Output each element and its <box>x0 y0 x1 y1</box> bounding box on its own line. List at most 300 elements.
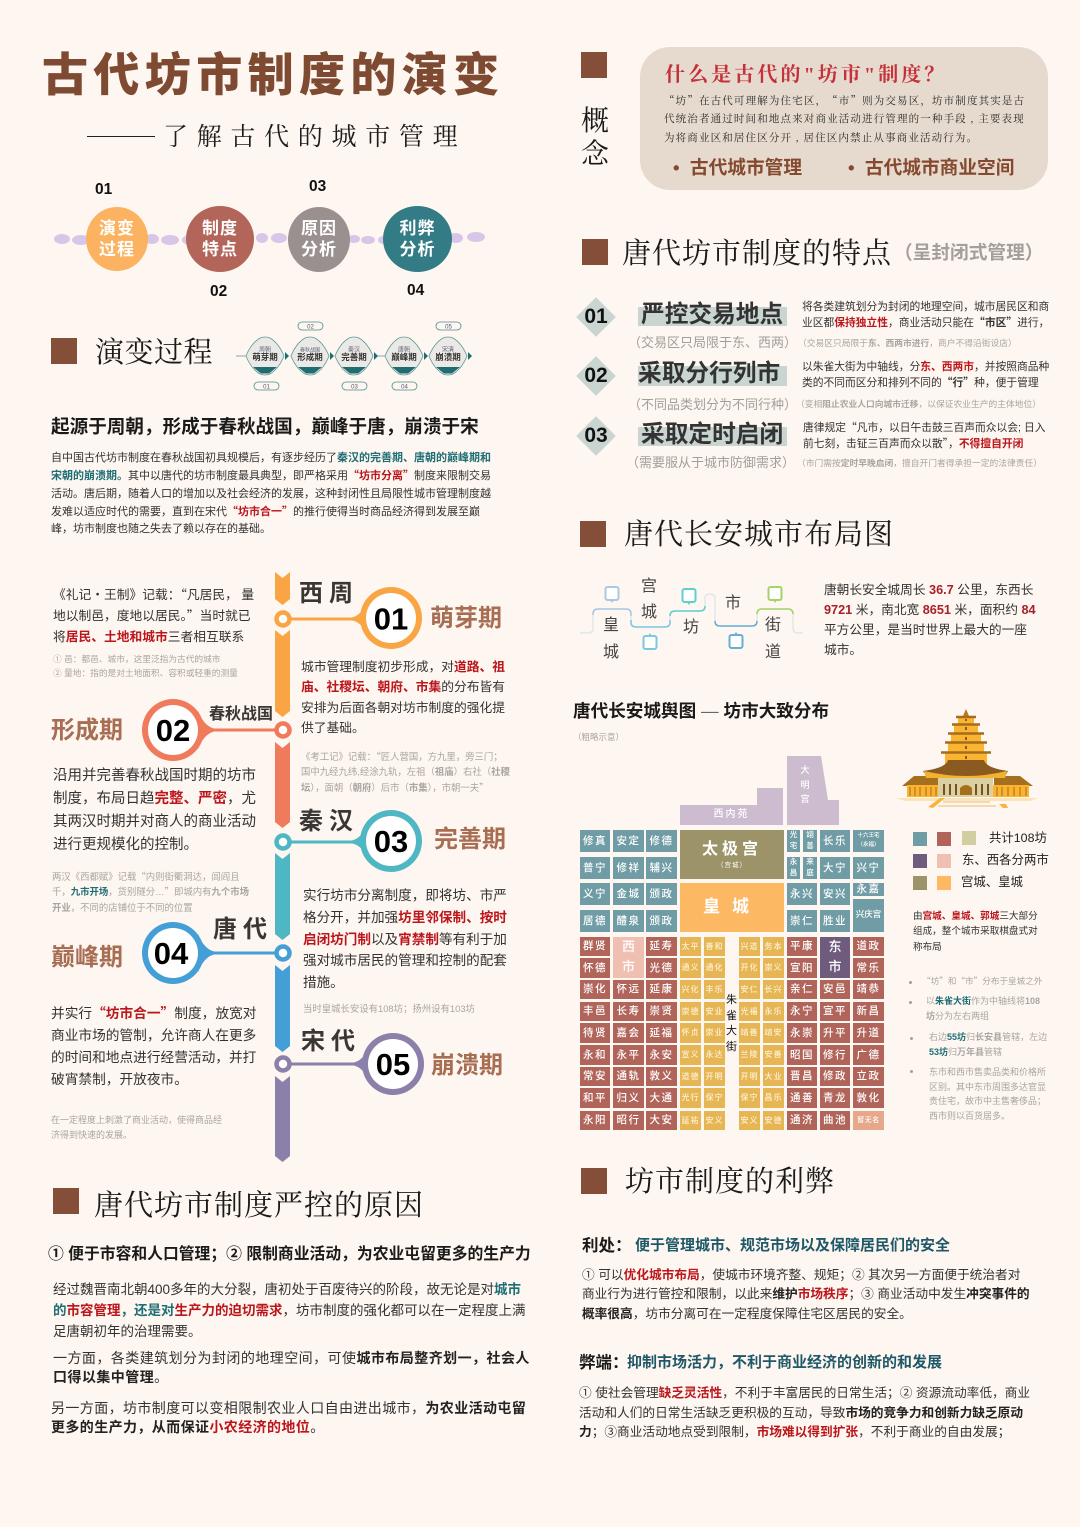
node 04: 利弊 <box>400 219 436 238</box>
palace gardens <box>680 756 839 825</box>
map of Chang'an: 永崇 <box>790 1027 814 1039</box>
section heading: features: 唐代坊市制度的特点 <box>622 238 892 270</box>
mini flow diagram of five periods: 宋清 <box>442 346 454 354</box>
map of Chang'an: 丰乐 <box>706 985 724 994</box>
map of Chang'an: 宣平 <box>823 1005 847 1017</box>
left note: Xidufu <box>52 869 249 913</box>
evolution paragraph: 活动。唐后期，随着人口的增加以及社会经济的发展，这种封闭性且局限性城市管理制度越 <box>51 488 491 500</box>
left note: definitions: ② 量地：指的是对土地面积、容积或轻重的测量 <box>53 668 238 678</box>
map of Chang'an: 通济 <box>790 1114 814 1126</box>
map of Chang'an: 崇业 <box>706 1028 724 1037</box>
right text: period 01: 供了基础。 <box>301 720 365 735</box>
bullet 3 <box>910 1037 913 1040</box>
Taiji palace <box>680 830 784 879</box>
map of Chang'an: 永兴 <box>790 888 814 900</box>
map of Chang'an: 常乐 <box>856 962 880 974</box>
dynasty: Western Zhou: 西周 <box>299 580 359 607</box>
map of Chang'an: 永平 <box>616 1049 640 1061</box>
map of Chang'an: 崇仁 <box>790 915 814 927</box>
map of Chang'an: 保宁 <box>740 1093 758 1102</box>
map of Chang'an: 亲仁 <box>790 983 814 995</box>
map of Chang'an: 敦义 <box>650 1070 674 1082</box>
map of Chang'an: 广德 <box>856 1049 880 1061</box>
feature 03 <box>576 416 1046 470</box>
note 4: 区别。其中东市周围多达官显 <box>929 1082 1046 1092</box>
map of Chang'an: 光福 <box>740 1007 758 1016</box>
mini flow diagram of five periods: 完善期 <box>341 352 367 362</box>
label: palace city: 宫 <box>641 578 657 595</box>
period name: formation: 形成期 <box>51 717 123 744</box>
left text: period 02 <box>53 767 256 853</box>
map composition text: 由宫城、皇城、郭城三大部分 <box>913 911 1038 922</box>
label: imperial city <box>603 616 619 661</box>
East market <box>820 937 850 978</box>
feature 02 <box>576 356 1049 412</box>
feature 01 note: （交易区只局限于东、西两市进行，商户不得沿街设店） <box>798 338 1017 348</box>
number 04: 04 <box>407 282 424 299</box>
bullet 2 <box>909 1001 912 1004</box>
upper left wards <box>580 830 677 932</box>
reasons paragraph 2: 一方面，各类建筑划分为封闭的地理空间，可使城市布局整齐划一，社会人 <box>53 1350 530 1366</box>
evolution paragraph: 发难以适应时代的需要，直到在宋代“坊市合一”的推行使得当时商品经济得到发展至巅 <box>51 503 480 519</box>
right note: Kaogongji: 国中九经九纬,经涂九轨，左祖（祖庙）右社（社稷 <box>301 766 510 777</box>
concept question: 什么是古代的"坊市"制度？ <box>665 64 948 86</box>
section square: reasons <box>53 1188 79 1214</box>
right text: period 03: 强对城市居民的管理和控制的配套 <box>303 953 507 968</box>
map of Chang'an: 宅 <box>790 840 797 850</box>
map of Chang'an: 安业 <box>706 1007 724 1016</box>
map of Chang'an: 永嘉 <box>856 883 880 895</box>
table of contents <box>54 178 485 300</box>
node 01: 过程 <box>99 240 135 259</box>
map of Chang'an: 道德 <box>682 1072 700 1081</box>
map of Chang'an: 通化 <box>706 963 724 972</box>
period name: peak: 巅峰期 <box>51 944 123 971</box>
right note: Kaogongji: 坛），面朝（朝府）后市（市集），市朝一夫” <box>301 780 489 794</box>
left text: period 04: 的时间和地点进行经营活动，并打 <box>51 1050 256 1065</box>
reasons paragraph 1: 经过魏晋南北朝400多年的大分裂，唐初处于百废待兴的阶段，故无论是对城市 <box>53 1282 521 1297</box>
evolution paragraph: 自中国古代坊市制度在春秋战国初具规模后，有逐步经历了秦汉的完善期、唐朝的巅峰期和 <box>51 452 491 464</box>
evolution paragraph: 峰，坊市制度也随之失去了赖以存在的基础。 <box>51 523 271 535</box>
feature 02 diamond <box>576 356 616 396</box>
concept explanation: 代统治者通过时间和地点来对商业活动进行管理的一种手段 , 主要表现 <box>664 114 1025 125</box>
left note: definitions: ① 邑：都邑、城市，这里泛指为古代的城市 <box>53 654 220 664</box>
note 4: 东市和西市售卖品类和价格所 <box>929 1067 1046 1077</box>
imperial city: 皇城 <box>703 897 761 916</box>
map of Chang'an: 新昌 <box>856 1005 880 1017</box>
left text: Liji quotation: 将居民、土地和城市三者相互联系 <box>53 629 244 644</box>
evolution paragraph <box>51 452 491 535</box>
reasons paragraph 3 <box>51 1400 526 1435</box>
Chang'an city facts: 9721 米，南北宽 8651 米，面积约 84 <box>824 603 1036 617</box>
map of Chang'an: 昌乐 <box>764 1093 782 1102</box>
map of Chang'an: 和平 <box>583 1092 607 1104</box>
concept explanation: “坊”在古代可理解为住宅区，“市”则为交易区，坊市制度其实是古 <box>664 93 1025 108</box>
map of Chang'an: 颁政 <box>650 888 674 900</box>
map of Chang'an: 通善 <box>790 1092 814 1104</box>
map of Chang'an <box>580 756 884 1130</box>
note 4: 西市则以百货居多。 <box>929 1111 1010 1121</box>
left text: period 02: 制度，布局日趋完整、严密，尤 <box>53 791 256 807</box>
left text: Liji quotation: 地以制邑，度地以居民。”当时就已 <box>53 605 251 624</box>
concept explanation <box>664 93 1025 144</box>
legend text: markets: 东、西各分两市 <box>962 853 1049 867</box>
left text: period 02: 进行更规模化的控制。 <box>53 837 198 853</box>
map of Chang'an: 崇化 <box>583 983 607 995</box>
benefits paragraph: 商业行为进行管控和限制，以此来维护市场秩序；③ 商业活动中发生冲突事件的 <box>582 1287 1030 1301</box>
map of Chang'an: 怀贞 <box>682 1028 700 1037</box>
feature 02 text <box>802 360 1049 390</box>
left text: period 04: 破宵禁制，开放夜市。 <box>51 1072 188 1087</box>
map of Chang'an: 居德 <box>583 915 607 927</box>
mini flow diagram of five periods: 周朝 <box>259 346 271 354</box>
map of Chang'an: 延寿 <box>650 940 674 952</box>
reasons paragraph 1: 的市容管理，还是对生产力的迫切需求，坊市制度的强化都可以在一定程度上满 <box>53 1303 526 1318</box>
map composition text: 称布局 <box>913 942 942 953</box>
mini flow diagram of five periods: 秦汉 <box>348 346 360 354</box>
map of Chang'an: 辅兴 <box>650 862 674 874</box>
feature 01 subtitle: （交易区只局限于东、西两） <box>628 335 797 350</box>
feature 01 text: 业区都保持独立性，商业活动只能在“市区”进行， <box>802 315 1049 330</box>
Zhuque avenue: 朱 <box>726 994 737 1006</box>
section square: evolution <box>51 338 77 364</box>
note 2: 坊分为左右两组 <box>926 1010 989 1020</box>
reasons paragraph 1 <box>53 1282 526 1339</box>
map of Chang'an: 兴宁 <box>856 862 880 874</box>
legend <box>913 830 1048 892</box>
number 01: 01 <box>95 181 112 198</box>
feature 03 subtitle: （需要服从于城市防御需求） <box>626 455 795 470</box>
node 03 <box>288 207 350 272</box>
benefits paragraph <box>582 1266 1030 1324</box>
drawbacks heading: 弊端： <box>579 1354 628 1372</box>
note 1: “坊”和“市”分布于皇城之外 <box>922 975 1042 987</box>
map of Chang'an: 丰邑 <box>583 1005 607 1017</box>
node 02: 制度 <box>202 219 238 238</box>
mini flow diagram of five periods <box>236 322 472 390</box>
keyword: ancient urban commercial space: • 古代城市商业空间 <box>848 157 1014 178</box>
Zhuque avenue: 街 <box>726 1040 737 1052</box>
reasons paragraph 3: 另一方面，坊市制度可以变相限制农业人口自由进出城市，为农业活动屯留 <box>51 1400 526 1416</box>
map of Chang'an: 安德 <box>764 1116 782 1125</box>
section square: layout <box>580 521 606 547</box>
title: 古代坊市制度的演变 <box>42 49 505 101</box>
map of Chang'an: 升道 <box>856 1027 880 1039</box>
map of Chang'an: 永和 <box>583 1049 607 1061</box>
reasons summary line: ① 便于市容和人口管理；② 限制商业活动，为农业屯留更多的生产力 <box>48 1246 531 1263</box>
legend swatches: palaces <box>913 829 1048 831</box>
map of Chang'an: 修行 <box>823 1049 847 1061</box>
left text: period 02: 其两汉时期并对商人的商业活动 <box>53 814 256 830</box>
label: imperial city: 城 <box>603 644 619 661</box>
label: street: 街 <box>765 617 781 634</box>
feature 03 text: 前七刻，击钲三百声而众以散”，不得擅自开闭 <box>803 436 1023 451</box>
panel: concept definition <box>640 47 1048 190</box>
node 01: 演变 <box>99 219 135 238</box>
left text: Liji quotation: 《礼记・王制》记载：“凡居民， 量 <box>53 584 254 603</box>
benefits paragraph: 概率很高，坊市分离可在一定程度保障住宅区居民的安全。 <box>582 1307 912 1321</box>
map of Chang'an: 永乐 <box>764 1007 782 1016</box>
map of Chang'an: 兴化 <box>682 985 700 994</box>
map of Chang'an: 升平 <box>823 1027 847 1039</box>
map of Chang'an: 崇义 <box>764 963 782 972</box>
left note: effect of the merger: 济得到快速的发展。 <box>51 1130 132 1140</box>
feature 01 label bar <box>638 307 787 326</box>
evolution paragraph: 宋朝的崩溃期。其中以唐代的坊市制度最具典型，即严格采用“坊市分离”制度来限制交易 <box>51 467 491 483</box>
map of Chang'an: 胜业 <box>823 915 847 927</box>
map of Chang'an: 兴庆宫 <box>856 909 881 919</box>
left text: period 04: 商业市场的管制，允许商人在更多 <box>51 1028 256 1043</box>
node 03: 分析 <box>301 240 337 259</box>
map of Chang'an: 敦化 <box>856 1092 880 1104</box>
map of Chang'an: 靖善 <box>740 1028 758 1037</box>
timeline spine with rings, connectors and number badges: 04 <box>154 936 189 971</box>
feature 02 number: 02 <box>584 364 608 387</box>
right text: period 03: 实行坊市分离制度，即将坊、市严 <box>303 888 507 903</box>
map of Chang'an: 兴道 <box>740 942 758 951</box>
right note: Kaogongji <box>301 749 510 794</box>
Xineiyuan label: 西内苑 <box>714 809 750 820</box>
left text: period 04: 并实行“坊市合一”制度，放宽对 <box>51 1002 256 1022</box>
mini flow diagram of five periods: 崩溃期 <box>435 352 461 362</box>
period name: budding: 萌芽期 <box>430 605 502 632</box>
mini flow diagram of five periods: 萌芽期 <box>252 352 278 362</box>
dotted lavender line <box>54 232 485 245</box>
reasons paragraph 2 <box>53 1350 530 1385</box>
map of Chang'an: 兰陵 <box>740 1050 758 1059</box>
map of Chang'an: 晋昌 <box>790 1070 814 1082</box>
label: street <box>765 616 781 661</box>
note 3: 右边55坊归长安县管辖，左边 <box>929 1032 1047 1042</box>
evolution heading line: 起源于周朝，形成于春秋战国，巅峰于唐，崩溃于宋 <box>51 416 479 437</box>
timeline spine with rings, connectors and number badges <box>142 572 424 1162</box>
feature 01 title: 严控交易地点 <box>641 302 783 328</box>
number 03: 03 <box>309 178 326 195</box>
map of Chang'an: 修真 <box>583 835 607 847</box>
left note: Xidufu: 开业，不同的店铺位于不同的位置 <box>52 902 193 913</box>
timeline spine with rings, connectors and number badges: 03 <box>374 824 408 859</box>
mini flow diagram of five periods: 03 <box>351 384 358 390</box>
map of Chang'an: 崇贤 <box>650 1005 674 1017</box>
period name: collapse: 崩溃期 <box>431 1052 503 1079</box>
reasons paragraph 2: 口得以集中管理。 <box>53 1369 169 1385</box>
East market: 市 <box>828 959 842 974</box>
legend swatches: wards <box>913 829 1048 831</box>
drawbacks paragraph: 活动和人们的日常生活缺乏更积极的互动，导致市场的竞争力和创新力缺乏原动 <box>579 1406 1023 1420</box>
note 4 <box>929 1065 1046 1123</box>
map of Chang'an: 曲池 <box>823 1114 847 1126</box>
dynasty: Spring and Autumn and Warring States: 春秋战国 <box>209 706 273 723</box>
right text: period 01: 庙、社稷坛、朝府、市集的分布皆有 <box>301 679 505 694</box>
map of Chang'an: 延祐 <box>682 1116 700 1125</box>
keyword: ancient city management: • 古代城市管理 <box>673 157 802 178</box>
bullet 1 <box>909 981 912 984</box>
feature 03 note: （市门需按定时早晚启闭，擅自开门者得承担一定的法律责任） <box>797 458 1042 468</box>
map of Chang'an: 暂无名 <box>857 1117 880 1124</box>
map composition text <box>913 909 1038 955</box>
map of Chang'an: 永安 <box>650 1049 674 1061</box>
concept explanation: 为将商业区和居住区分开 , 居住区内禁止从事商业活动行为。 <box>664 133 978 144</box>
map of Chang'an: 善 <box>806 840 814 850</box>
node 04: 分析 <box>400 240 436 259</box>
drawbacks paragraph: 力；③商业活动地点受到限制，市场难以得到扩张，不利于商业的自由发展； <box>579 1425 1010 1439</box>
left text: Liji quotation <box>53 584 254 644</box>
section square: pros and cons <box>581 1168 607 1194</box>
timeline spine with rings, connectors and number badges: 05 <box>376 1047 410 1082</box>
label: ward: 坊 <box>683 619 699 636</box>
map of Chang'an: 安义 <box>706 1116 724 1125</box>
map of Chang'an: 颁政 <box>650 915 674 927</box>
feature 01 <box>576 298 1049 350</box>
mini flow diagram of five periods: 04 <box>401 384 408 390</box>
Zhuque avenue: 雀 <box>726 1010 737 1022</box>
mini flow diagram of five periods: 唐朝 <box>398 346 410 354</box>
map of Chang'an: 光行 <box>682 1093 700 1102</box>
number 02: 02 <box>210 283 227 300</box>
map of Chang'an: 立政 <box>856 1070 880 1082</box>
note 4: 贵住宅，故市中主售奢侈品； <box>929 1096 1046 1106</box>
map of Chang'an: 大宁 <box>823 862 847 874</box>
map of Chang'an: 青龙 <box>823 1092 847 1104</box>
right text: period 03: 启闭坊门制以及宵禁制等有利于加 <box>303 932 507 947</box>
map of Chang'an: 延福 <box>650 1027 674 1039</box>
left note: effect of the merger: 在一定程度上刺激了商业活动，使得商品经 <box>51 1115 222 1125</box>
left note: definitions <box>53 654 238 678</box>
map of Chang'an: 来 <box>806 857 814 866</box>
map of Chang'an: 平康 <box>790 940 814 952</box>
map of Chang'an: 宣义 <box>682 1050 700 1059</box>
upper right wards <box>578 754 888 756</box>
map of Chang'an: 宣阳 <box>790 962 814 974</box>
Daming palace label: 明 <box>800 780 810 790</box>
feature 01 text <box>802 300 1049 330</box>
map of Chang'an: 务本 <box>764 942 782 951</box>
legend text: wards: 共计108坊 <box>989 831 1047 845</box>
dynasty: Tang: 唐代 <box>213 916 273 943</box>
map of Chang'an: 太平 <box>682 942 700 951</box>
map of Chang'an: 永 <box>790 857 797 866</box>
node 02 <box>186 206 254 272</box>
section heading: pros and cons: 坊市制度的利弊 <box>625 1166 835 1198</box>
map of Chang'an: 开明 <box>706 1072 724 1081</box>
feature 02 label bar <box>638 366 787 386</box>
left text: period 02: 沿用并完善春秋战国时期的坊市 <box>53 768 256 784</box>
map of Chang'an: 翊 <box>806 830 814 839</box>
left note: Xidufu: 千，九市开场，货别隧分…”即城内有九个市场 <box>52 884 249 898</box>
map of Chang'an: （永福） <box>857 842 880 848</box>
reasons paragraph 1: 足唐朝初年的治理需要。 <box>53 1324 202 1339</box>
right text: period 01: 安排为后面各朝对坊市制度的强化提 <box>301 700 505 715</box>
text: 抑制市场活力，不利于商业经济的创新的和发展 <box>627 1354 942 1371</box>
map of Chang'an: 怀远 <box>616 983 640 995</box>
map of Chang'an: 安邑 <box>823 983 847 995</box>
left note: effect of the merger <box>51 1115 222 1140</box>
map of Chang'an: 大通 <box>650 1092 674 1104</box>
map of Chang'an: 长寿 <box>616 1005 640 1017</box>
section heading: layout: 唐代长安城市布局图 <box>624 519 894 551</box>
section square: features <box>582 239 608 265</box>
Taiji palace: 太极宫 <box>702 841 762 858</box>
map of Chang'an: 永阳 <box>583 1114 607 1126</box>
dynasty: Song: 宋代 <box>301 1028 361 1055</box>
subtitle: 了解古代的城市管理 <box>163 124 466 151</box>
map of Chang'an: 道政 <box>856 940 880 952</box>
map of Chang'an: 通义 <box>682 963 700 972</box>
dynasty: Qin Han: 秦汉 <box>299 808 359 835</box>
map of Chang'an: 待贤 <box>583 1027 607 1039</box>
mini flow diagram of five periods: 01 <box>263 384 270 390</box>
drawbacks paragraph <box>579 1384 1030 1443</box>
map of Chang'an: 大业 <box>764 1072 782 1081</box>
lower right wards <box>578 754 888 756</box>
map note: （粗略示意） <box>573 732 624 742</box>
reasons paragraph 3: 更多的生产力，从而保证小农经济的地位。 <box>51 1419 325 1435</box>
map of Chang'an: 怀德 <box>583 962 607 974</box>
note 3: 53坊归万年县管辖 <box>929 1046 1002 1056</box>
map of Chang'an: 庭 <box>806 868 814 876</box>
Daming palace label <box>800 765 810 804</box>
map of Chang'an: 靖恭 <box>856 983 880 995</box>
timeline spine with rings, connectors and number badges: 01 <box>374 602 408 636</box>
note 2 <box>926 994 1040 1023</box>
map of Chang'an: 通轨 <box>616 1070 640 1082</box>
map of Chang'an: 修德 <box>650 835 674 847</box>
imperial city <box>680 883 784 932</box>
map of Chang'an: 光 <box>790 830 797 839</box>
feature 03 text: 唐律规定“凡市，以日午击鼓三百声而众以会; 日入 <box>803 420 1046 435</box>
period name: perfection: 完善期 <box>434 826 506 853</box>
node 03: 原因 <box>301 219 337 238</box>
Daming palace label: 大 <box>800 765 810 775</box>
label: palace city <box>641 577 657 621</box>
drawbacks paragraph: ① 使社会管理缺乏灵活性，不利于丰富居民的日常生活；② 资源流动率低，商业 <box>579 1386 1030 1400</box>
map of Chang'an: 安仁 <box>740 985 758 994</box>
legend swatches: markets <box>913 829 1048 831</box>
map of Chang'an: 靖安 <box>764 1028 782 1037</box>
feature 03 title: 采取定时启闭 <box>641 422 783 448</box>
map of Chang'an: 开明 <box>740 1072 758 1081</box>
Chang'an city facts: 唐朝长安全城周长 36.7 公里，东西长 <box>824 583 1033 597</box>
map of Chang'an: 金城 <box>616 888 640 900</box>
lower left wards <box>578 754 888 756</box>
map of Chang'an: 常安 <box>583 1070 607 1082</box>
section heading: evolution: 演变过程 <box>95 337 213 369</box>
label: palace city: 城 <box>641 604 657 621</box>
right text: period 03: 措施。 <box>303 975 344 990</box>
map of Chang'an: 永宁 <box>790 1005 814 1017</box>
left note: Xidufu: 两汉《西都赋》记载“内则街衢洞达，闾阎且 <box>52 869 240 883</box>
stepped diagram: palace, imperial city, ward, market, street <box>580 577 803 661</box>
map of Chang'an: 普宁 <box>583 862 607 874</box>
map of Chang'an: 义宁 <box>583 888 607 900</box>
node 02: 特点 <box>202 240 238 259</box>
feature 01 diamond <box>576 297 616 337</box>
feature 02 title: 采取分行列市 <box>638 361 780 387</box>
left text: period 04 <box>51 1002 256 1087</box>
section heading: reasons: 唐代坊市制度严控的原因 <box>94 1190 424 1222</box>
map of Chang'an: 十六王宅 <box>857 833 880 839</box>
map of Chang'an: 长兴 <box>764 985 782 994</box>
note 2: 以朱雀大街作为中轴线将108 <box>926 996 1040 1006</box>
concept vertical label <box>581 106 609 170</box>
mini flow diagram of five periods: 05 <box>445 324 452 330</box>
map of Chang'an: 安善 <box>764 1050 782 1059</box>
feature 03 text <box>803 420 1046 451</box>
map of Chang'an: 修祥 <box>616 862 640 874</box>
map heading: 唐代长安城舆图 — 坊市大致分布 <box>573 701 829 721</box>
features heading note: （呈封闭式管理） <box>894 242 1044 263</box>
map of Chang'an: 醴泉 <box>616 915 640 927</box>
